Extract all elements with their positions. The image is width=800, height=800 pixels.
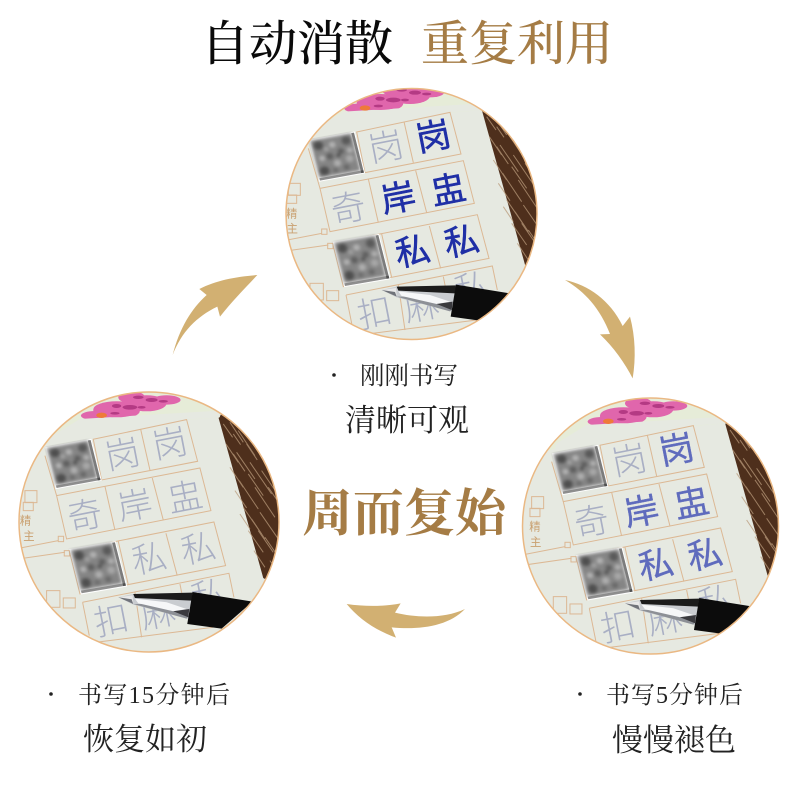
caption line: 5 minutes later: 书写5分钟后 [606, 682, 743, 709]
panel: 5 minutes photo: 扣 [598, 606, 639, 650]
panel: freshly written photo: 岸 [378, 177, 419, 221]
caption: top [332, 362, 469, 438]
panel: 15 minutes photo: 岗 [102, 434, 143, 478]
caption line: just written: 刚刚书写 [360, 362, 458, 390]
caption line: 15 minutes later: 书写15分钟后 [78, 682, 230, 709]
panel: 15 minutes photo: 私 [129, 538, 170, 582]
panel: freshly written photo: 精 [286, 207, 297, 220]
panel: freshly written photo: 岗 [366, 126, 407, 170]
caption line: slowly fading: 慢慢褪色 [612, 723, 736, 758]
caption: left [49, 682, 230, 757]
photo ring: right [522, 398, 778, 654]
panel: 5 minutes photo: 盅 [671, 482, 712, 526]
title: gold part: 重复利用 [421, 18, 613, 71]
panel: 5 minutes photo: 私 [636, 544, 677, 588]
center heading: 周而复始 [302, 486, 510, 543]
panel: 15 minutes photo: 私 [178, 528, 219, 572]
panel: freshly written photo: 私 [451, 267, 492, 311]
arrow: top to right [565, 280, 635, 378]
panel: 5 minutes photo [523, 398, 778, 654]
panel: freshly written photo: 扣 [355, 292, 396, 336]
panel: freshly written photo: 私 [392, 231, 433, 275]
panel: 15 minutes photo [20, 392, 278, 652]
panel: 5 minutes photo: 主 [530, 536, 541, 549]
panel: 15 minutes photo: 麻 [138, 593, 179, 637]
photo ring: left [19, 392, 279, 652]
panel: 5 minutes photo: 麻 [645, 599, 686, 643]
panel: freshly written photo: 岗 [413, 116, 454, 160]
panel: 15 minutes photo: 私 [188, 575, 229, 619]
panel: freshly written photo: 奇 [328, 187, 369, 231]
panel: 15 minutes photo: 奇 [64, 495, 106, 539]
panel: 15 minutes photo: 岗 [149, 423, 191, 467]
panel: 15 minutes photo: 主 [23, 530, 35, 543]
panel: freshly written photo: 麻 [401, 286, 442, 330]
panel: freshly written photo: 私 [441, 221, 482, 265]
panel: 15 minutes photo: 精 [20, 515, 31, 528]
title: black part: 自动消散 [201, 18, 393, 71]
photo ring: top [286, 88, 537, 340]
panel: 5 minutes photo: 精 [529, 521, 541, 534]
panel: freshly written photo: 盅 [428, 169, 469, 213]
panel: 15 minutes photo: 盅 [164, 476, 206, 520]
arrow: left to top [173, 275, 257, 355]
caption line: restored: 恢复如初 [83, 722, 207, 757]
panel: 5 minutes photo: 奇 [571, 501, 612, 545]
caption: right [578, 682, 743, 758]
panel: 5 minutes photo: 岗 [609, 440, 650, 484]
panel: 15 minutes photo: 岸 [114, 485, 156, 529]
panel: 5 minutes photo: 岸 [621, 491, 662, 535]
panel: 5 minutes photo: 私 [695, 581, 736, 625]
caption line: clearly visible: 清晰可观 [345, 403, 469, 438]
panel: 5 minutes photo: 私 [685, 534, 726, 578]
arrow: right to left [347, 603, 465, 638]
panel: freshly written photo [286, 89, 536, 339]
panel: freshly written photo: 主 [287, 223, 298, 236]
panel: 15 minutes photo: 扣 [91, 600, 132, 644]
panel: 5 minutes photo: 岗 [656, 429, 697, 473]
title [201, 18, 613, 71]
